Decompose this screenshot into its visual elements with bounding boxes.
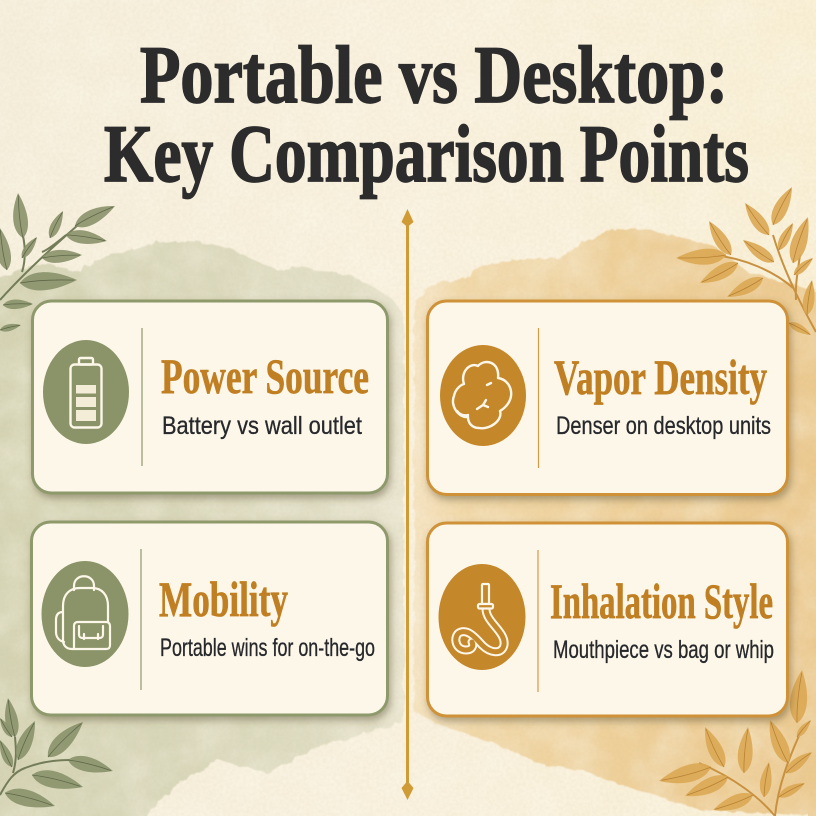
icon: cloud <box>440 345 526 446</box>
text: portable wins: Portable wins for on-the-go <box>160 634 375 662</box>
icon: battery <box>43 340 129 444</box>
panel: mobility <box>32 522 388 715</box>
title <box>104 29 749 199</box>
leaves: top right sprig <box>676 184 816 338</box>
heading: mobility: Mobility <box>159 571 288 627</box>
center divider arrow <box>402 209 414 800</box>
icon: backpack <box>42 561 128 667</box>
icon: whip hose <box>438 564 526 670</box>
panel: inhalation style <box>428 523 788 716</box>
leaves: bottom left sprig <box>0 697 115 814</box>
leaves: bottom right sprig <box>657 669 815 816</box>
leaves: top left sprig <box>0 192 118 333</box>
panel: power source <box>32 301 388 493</box>
heading: power source: Power Source <box>161 348 369 404</box>
text: battery vs wall outlet: Battery vs wall outlet <box>162 412 362 440</box>
panel: vapor density <box>428 301 788 494</box>
